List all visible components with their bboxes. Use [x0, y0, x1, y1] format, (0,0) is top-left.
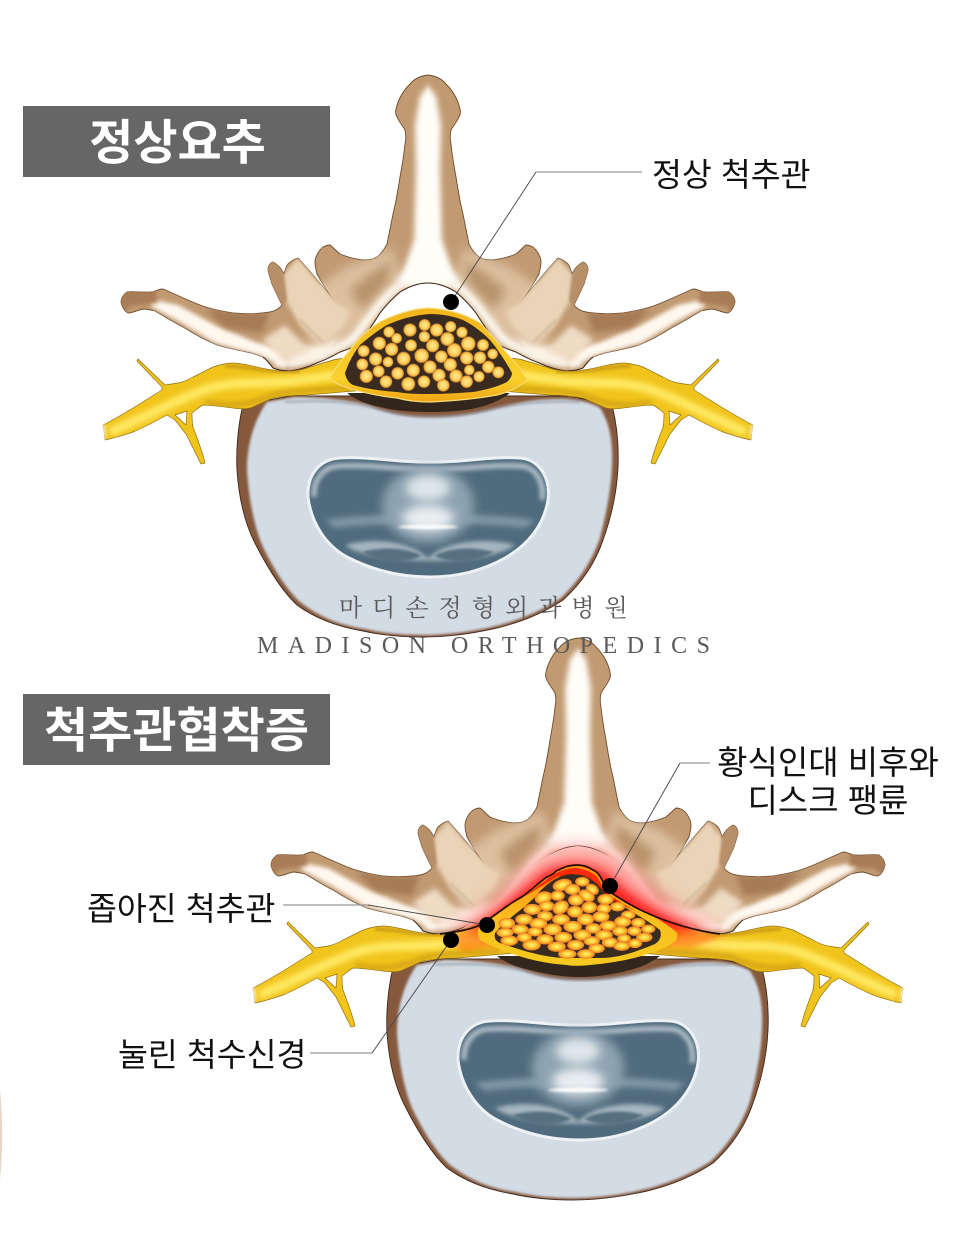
canal fill behind sac	[425, 846, 735, 940]
edge sliver	[0, 1090, 2, 1180]
vertebral arch right (normal)	[411, 75, 736, 371]
vertebral arch left (stenosis)	[270, 638, 595, 934]
red inflammation glow	[470, 865, 700, 938]
title box: normal lumbar	[23, 106, 330, 177]
callout: normal spinal canal	[443, 157, 811, 310]
nerve root left (normal)	[93, 358, 365, 464]
title box: spinal stenosis: 척추관협착증	[44, 705, 309, 758]
callout: compressed spinal nerve	[118, 932, 459, 1073]
spinal sac interior (stenosis)	[495, 874, 661, 958]
nerve root right (stenosis)	[641, 921, 913, 1027]
nerve rootlets (normal)	[356, 319, 504, 392]
spinal sac outer (normal)	[330, 308, 527, 402]
title box: spinal stenosis	[23, 694, 330, 765]
watermark: 마디손정형외과병원	[339, 595, 638, 622]
vertebral disc (normal)	[237, 396, 618, 637]
pink inflammation glow	[445, 846, 725, 938]
callout: compressed spinal nerve: 눌린 척수신경	[118, 1037, 306, 1073]
watermark: MADISON ORTHOPEDICS	[257, 633, 719, 659]
vertebral arch left (normal)	[120, 75, 445, 371]
orange compressed nerve	[445, 925, 722, 952]
vertebral arch right (stenosis)	[561, 638, 886, 934]
callout: ligament hypertrophy and disc bulge	[602, 744, 939, 894]
spinal sac interior (normal)	[345, 314, 512, 394]
dark ledge under spinal canal (stenosis)	[497, 956, 660, 977]
spinal sac outer (stenosis)	[478, 865, 677, 966]
nerve root left (stenosis)	[243, 921, 515, 1027]
callout: normal spinal canal: 정상 척추관	[652, 157, 811, 193]
nerve rootlets (stenosis)	[497, 877, 655, 958]
dark ledge under spinal canal (normal)	[347, 393, 510, 412]
anatomy: normal lumbar vertebra	[93, 75, 763, 637]
watermark	[257, 595, 719, 659]
anatomy: stenosis vertebra	[243, 638, 913, 1200]
callout: narrowed spinal canal: 좁아진 척추관	[87, 891, 275, 927]
callout: narrowed spinal canal	[87, 891, 495, 933]
callout: ligament hypertrophy and disc bulge: 디스크 팽륜	[748, 782, 908, 819]
bright red ligament	[517, 868, 638, 912]
thickened ligament outline	[440, 865, 720, 934]
callout: ligament hypertrophy and disc bulge: 황식인대 비후와	[717, 744, 939, 781]
nerve root right (normal)	[491, 358, 763, 464]
vertebral disc (stenosis)	[387, 959, 768, 1200]
title box: normal lumbar: 정상요추	[89, 117, 266, 170]
